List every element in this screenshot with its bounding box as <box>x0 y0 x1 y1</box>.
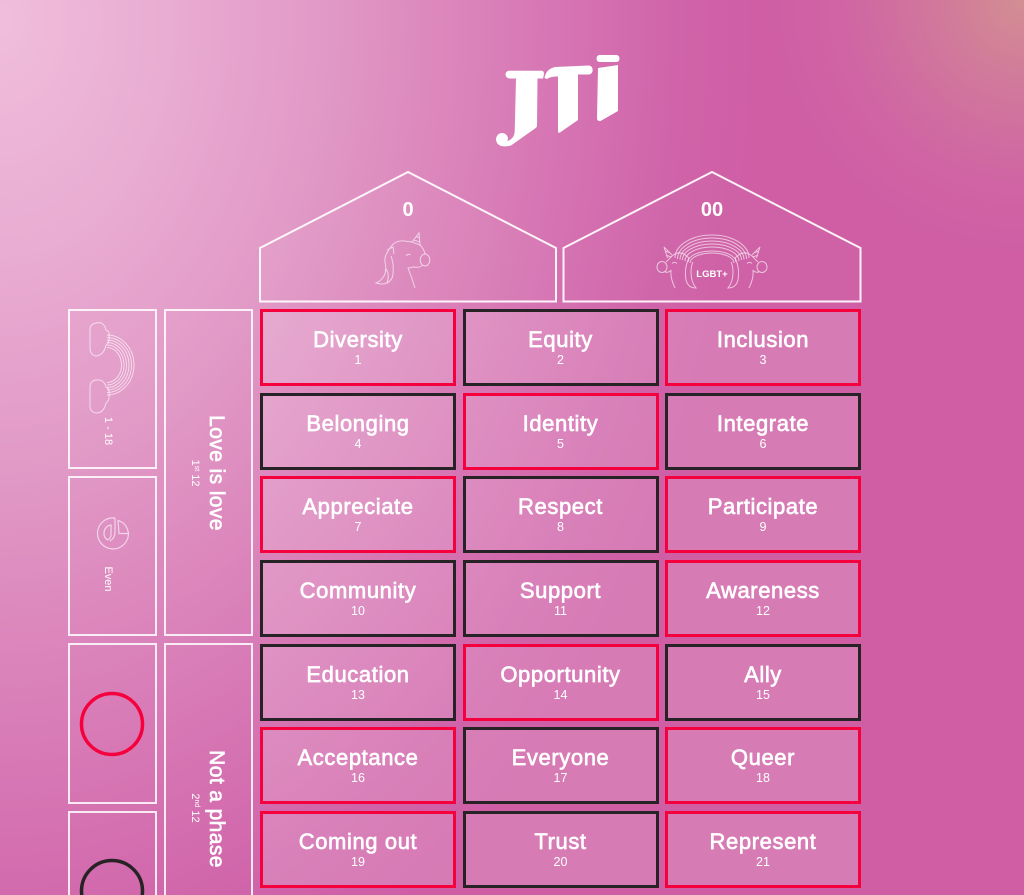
icon: black marker circle <box>82 860 142 895</box>
cell: Equity <box>462 309 658 386</box>
cell: Integrate: 6 <box>760 436 766 450</box>
cell: Coming out: 19 <box>351 855 365 869</box>
cell: Respect <box>462 476 658 553</box>
cell: Awareness: 12 <box>756 604 770 618</box>
cell: Belonging: 4 <box>355 436 361 450</box>
label: 1 - 18: 1 - 18 <box>102 417 114 445</box>
cell: Community: Community <box>300 578 416 603</box>
cell: Identity <box>462 392 658 470</box>
house number 00: 00 <box>701 199 723 221</box>
label: LGBT+: LGBT+ <box>696 269 728 280</box>
cell: Awareness: Awareness <box>706 578 820 603</box>
cell: Trust <box>462 811 658 888</box>
heading: Love is love: Love is love <box>205 415 228 531</box>
cell: Represent: Represent <box>710 829 816 854</box>
cell: Respect: 8 <box>557 520 564 534</box>
cell: Integrate: Integrate <box>717 410 809 436</box>
cell: Everyone: 17 <box>554 771 567 785</box>
cell: Education: 13 <box>351 688 365 702</box>
panel: even <box>68 476 157 636</box>
icon: rainbow with two unicorns <box>657 235 767 288</box>
label: 1st 12: 1 st 12 <box>189 460 201 486</box>
heading: Not a phase: Not a phase <box>205 750 228 868</box>
cell: Community <box>260 560 456 637</box>
panel: black <box>68 811 157 895</box>
cell: Opportunity: 14 <box>554 688 567 702</box>
cell: Ally: 15 <box>756 688 770 702</box>
cell: Participate <box>665 476 861 553</box>
cell: Everyone: Everyone <box>512 745 609 770</box>
cell: Awareness <box>665 560 861 637</box>
cell: Inclusion: 3 <box>760 353 766 367</box>
house: 0 <box>260 172 556 302</box>
cell: Diversity: Diversity <box>313 327 403 352</box>
label: 2nd 12: 2 nd 12 <box>189 793 201 823</box>
cell: Appreciate: 7 <box>355 520 361 534</box>
cell: Acceptance: Acceptance <box>298 745 418 770</box>
cell: Coming out: Coming out <box>299 829 417 854</box>
cell: Opportunity <box>462 644 658 720</box>
cell: Support: 11 <box>554 604 567 618</box>
cell: Identity: 5 <box>557 436 564 450</box>
cell: Community: 10 <box>351 604 365 618</box>
cell: Equity: 2 <box>557 353 564 367</box>
cell: Appreciate <box>260 476 456 553</box>
cell: Belonging <box>260 392 456 470</box>
cell: Education: Education <box>306 662 410 686</box>
cell: Ally: Ally <box>744 662 782 686</box>
logo: JTI <box>496 55 620 146</box>
cell: Queer: Queer <box>731 745 795 770</box>
cell: Integrate <box>665 392 861 470</box>
cell: Represent <box>665 811 861 888</box>
cell: Diversity <box>260 309 456 386</box>
cell: Education <box>260 644 456 720</box>
cell: Opportunity: Opportunity <box>500 662 621 686</box>
cell: Appreciate: Appreciate <box>302 494 414 519</box>
cell: Inclusion: Inclusion <box>717 327 809 352</box>
cell: Diversity: 1 <box>355 353 361 367</box>
cell: Represent: 21 <box>756 855 770 869</box>
cell: Inclusion <box>665 309 861 386</box>
panel: red <box>68 643 157 804</box>
house number 0: 0 <box>402 199 414 221</box>
cell: Belonging: Belonging <box>306 410 410 436</box>
cell: Identity: Identity <box>523 410 598 436</box>
cell: Coming out <box>260 811 456 888</box>
cell: Respect: Respect <box>518 494 603 519</box>
cell: Participate: Participate <box>708 494 818 519</box>
icon: even <box>98 518 128 549</box>
cell: Acceptance: 16 <box>351 771 365 785</box>
panel: rainbow 1-18 <box>68 309 157 469</box>
cell: Everyone <box>462 727 658 804</box>
cell: Acceptance <box>260 727 456 804</box>
icon: unicorn <box>376 233 430 288</box>
icon: red marker circle <box>82 694 142 754</box>
cell: Trust: 20 <box>554 855 567 869</box>
cell: Queer: 18 <box>756 771 770 785</box>
cell: Support <box>462 560 658 637</box>
cell: Trust: Trust <box>534 829 587 854</box>
cell: Queer <box>665 727 861 804</box>
panel: love is love <box>164 309 253 636</box>
panel: not a phase <box>164 643 253 895</box>
cell: Equity: Equity <box>528 327 593 352</box>
cell: Participate: 9 <box>760 520 766 534</box>
cell: Ally <box>665 644 861 720</box>
cell: Support: Support <box>520 578 601 603</box>
house: 00 <box>564 172 860 302</box>
label: Even: Even <box>102 566 114 592</box>
icon: sideways rainbow with clouds <box>90 323 134 413</box>
